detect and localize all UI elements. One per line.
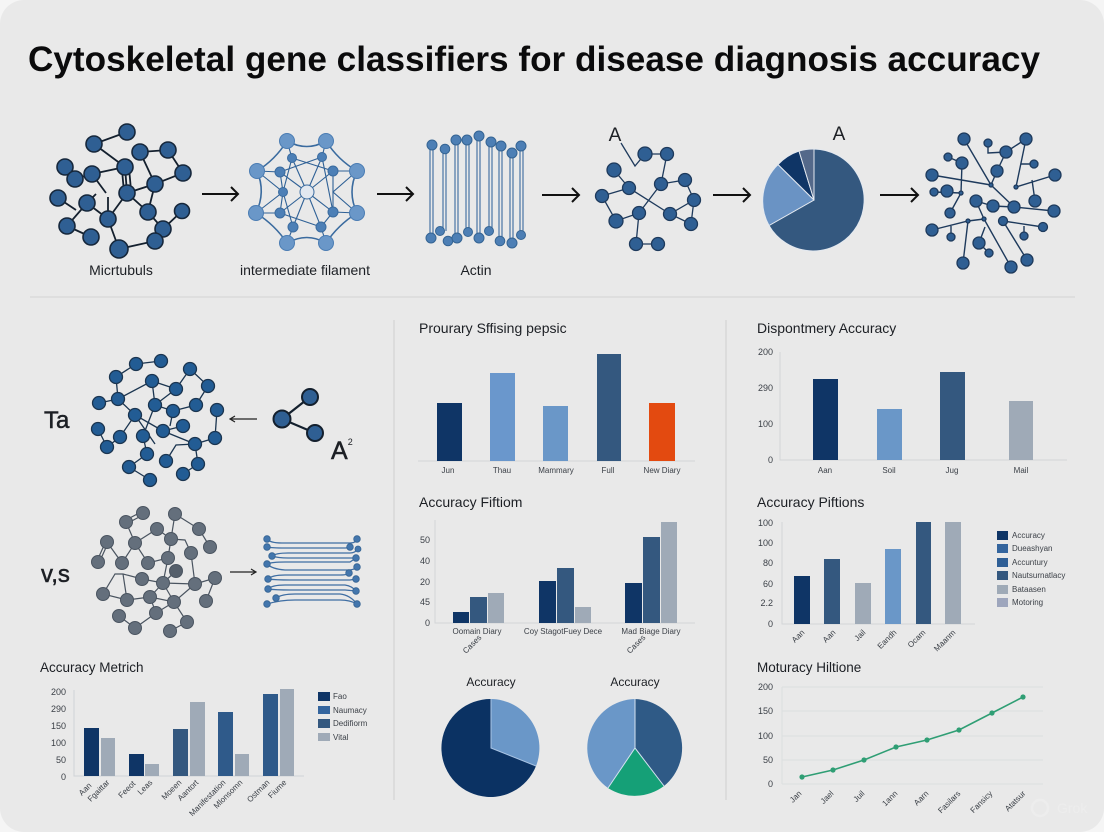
y axis labels bbox=[758, 518, 773, 629]
legend: Accuracy bbox=[1012, 531, 1045, 540]
y axis labels: 80 bbox=[763, 558, 773, 568]
y axis labels: 200 bbox=[51, 687, 66, 697]
x axis labels: Fiume bbox=[266, 778, 289, 800]
x axis labels: Mad Biage Diary bbox=[621, 627, 681, 636]
y axis labels: 100 bbox=[758, 518, 773, 528]
x axis labels: Aarn bbox=[912, 789, 930, 807]
y axis labels: 40 bbox=[420, 556, 430, 566]
legend: Fao bbox=[333, 692, 347, 701]
y axis labels: 150 bbox=[758, 706, 773, 716]
label: microtubules: Micrtubuls bbox=[89, 262, 153, 278]
icon: actin filaments bbox=[426, 131, 526, 248]
chart title: Accuracy Piftions bbox=[757, 494, 864, 510]
x axis labels: Oomain Diary bbox=[453, 627, 501, 636]
y axis labels: 20 bbox=[420, 577, 430, 587]
x axis labels: Coy StagotFuey Dece bbox=[524, 627, 603, 636]
x axis labels: Atatsur bbox=[1003, 789, 1028, 813]
x axis labels: Maanm bbox=[932, 628, 958, 653]
x axis labels: Full bbox=[602, 466, 615, 475]
chart title: Moturacy Hiltione bbox=[757, 660, 861, 675]
y axis labels: 0 bbox=[768, 779, 773, 789]
icon: intermediate filament network bbox=[248, 134, 364, 250]
pie chart: Accuracy 2 bbox=[587, 675, 682, 796]
chart title: Dispontmery Accuracy bbox=[757, 320, 896, 336]
x axis labels: Leas bbox=[136, 778, 154, 797]
chart: Accuracy Fiftiom bbox=[419, 494, 695, 655]
y axis labels: 60 bbox=[763, 579, 773, 589]
y axis labels: 150 bbox=[51, 721, 66, 731]
legend: Bataasen bbox=[1012, 585, 1046, 594]
x axis labels: Jug bbox=[946, 466, 958, 475]
icon: blue network bbox=[92, 354, 224, 486]
label: intermediate filament: intermediate filament bbox=[240, 262, 370, 278]
bars bbox=[453, 522, 677, 623]
bars bbox=[813, 372, 1033, 460]
x axis labels bbox=[453, 627, 681, 655]
y axis labels bbox=[51, 687, 66, 782]
x axis labels: Fansicy bbox=[969, 789, 994, 815]
x axis labels: Jail bbox=[853, 628, 868, 643]
y axis labels bbox=[420, 535, 430, 628]
x axis labels: Aan bbox=[790, 628, 806, 644]
x axis labels: 1ann bbox=[880, 789, 899, 808]
label: Ta: Ta bbox=[44, 407, 70, 434]
label: actin: Actin bbox=[460, 262, 492, 278]
x axis labels: Soil bbox=[882, 466, 896, 475]
pie title: Accuracy bbox=[466, 675, 516, 689]
icon: branching network bbox=[926, 133, 1061, 273]
icon: small node trio bbox=[274, 389, 323, 441]
pie title: Accuracy bbox=[610, 675, 660, 689]
bars bbox=[84, 689, 294, 776]
x axis labels: Thau bbox=[493, 466, 511, 475]
pie chart: Accuracy 1 bbox=[441, 675, 539, 797]
y axis labels: 0 bbox=[61, 772, 66, 782]
x axis labels: Aan bbox=[818, 466, 832, 475]
y axis labels: 100 bbox=[51, 738, 66, 748]
x axis labels: Juil bbox=[852, 789, 867, 804]
panel: pipeline bbox=[50, 124, 1061, 278]
y axis labels: 100 bbox=[758, 731, 773, 741]
x axis labels: New Diary bbox=[644, 466, 680, 475]
x axis labels: Eandh bbox=[876, 628, 898, 651]
watermark: Grok bbox=[1057, 800, 1088, 816]
legend: Nautsurnatlacy bbox=[1012, 571, 1065, 580]
label: v,s: v,s bbox=[41, 561, 70, 588]
arrow bbox=[542, 188, 579, 202]
arrow bbox=[202, 187, 238, 201]
arrow bbox=[377, 187, 413, 201]
y axis labels: 290 bbox=[51, 704, 66, 714]
y axis labels bbox=[758, 347, 773, 465]
arrow bbox=[230, 416, 257, 422]
x axis labels: Aan bbox=[821, 628, 837, 644]
watermark bbox=[1032, 800, 1088, 816]
y axis labels: 290 bbox=[758, 383, 773, 393]
label: A: A bbox=[833, 124, 846, 145]
legend: Motoring bbox=[1012, 598, 1043, 607]
x axis labels bbox=[818, 466, 1029, 475]
y axis labels: 0 bbox=[768, 455, 773, 465]
bars bbox=[437, 354, 675, 461]
legend: Dedifiorm bbox=[333, 719, 368, 728]
y axis labels: 0 bbox=[768, 619, 773, 629]
legend bbox=[318, 692, 368, 742]
y axis labels: 200 bbox=[758, 682, 773, 692]
label: A: A bbox=[609, 125, 622, 146]
x axis labels: Ocam bbox=[906, 628, 928, 650]
x axis labels: Jan bbox=[788, 789, 803, 805]
legend: Naumacy bbox=[333, 706, 367, 715]
y axis labels: 45 bbox=[420, 597, 430, 607]
x axis labels: Jael bbox=[819, 789, 836, 806]
legend: Dueashyan bbox=[1012, 544, 1052, 553]
x axis labels: Aan bbox=[77, 781, 93, 797]
legend bbox=[997, 531, 1065, 607]
x axis labels bbox=[788, 789, 1028, 815]
title: Cytoskeletal gene classifiers for disease diagnosis accuracy bbox=[28, 40, 1041, 79]
x axis labels: Feeot bbox=[117, 779, 138, 800]
y axis labels: 100 bbox=[758, 419, 773, 429]
panel: left networks bbox=[41, 354, 361, 638]
x axis labels: Ostman bbox=[245, 778, 271, 804]
chart: Accuracy Metrich bbox=[40, 660, 368, 818]
arrow bbox=[230, 569, 256, 575]
y axis labels: 50 bbox=[763, 755, 773, 765]
y axis labels: 100 bbox=[758, 538, 773, 548]
label: A squared: A bbox=[331, 437, 348, 465]
x axis labels: Mlonsomn bbox=[212, 778, 244, 811]
y axis labels: 200 bbox=[758, 347, 773, 357]
icon: microtubule network bbox=[50, 124, 191, 258]
arrow bbox=[713, 188, 750, 202]
icon: horizontal filaments bbox=[264, 536, 361, 607]
legend: Vital bbox=[333, 733, 349, 742]
y axis labels: 50 bbox=[56, 755, 66, 765]
x axis labels bbox=[77, 778, 289, 818]
chart: Moturacy Hiltione line chart bbox=[757, 660, 1043, 815]
x axis labels bbox=[790, 628, 958, 653]
chart title: Accuracy Metrich bbox=[40, 660, 144, 675]
x axis labels: Mammary bbox=[538, 466, 574, 475]
chart: Accuracy Piftions bbox=[757, 494, 1065, 653]
icon: classifier network bbox=[596, 143, 700, 250]
pie chart: pipeline bbox=[763, 149, 864, 251]
y axis labels: 2.2 bbox=[760, 598, 773, 608]
x axis labels: Mail bbox=[1014, 466, 1029, 475]
x axis labels: Fasilars bbox=[936, 789, 962, 815]
chart: Dispontmery Accuracy bbox=[757, 320, 1067, 475]
chart title: Accuracy Fiftiom bbox=[419, 494, 522, 510]
x axis labels: Cases bbox=[461, 633, 483, 655]
y axis labels: 0 bbox=[425, 618, 430, 628]
x axis labels: Cases bbox=[625, 633, 647, 655]
x axis labels: Manifestation bbox=[187, 778, 227, 818]
x axis labels: Jun bbox=[442, 466, 454, 475]
bars bbox=[794, 522, 961, 624]
x axis labels bbox=[442, 466, 680, 475]
x axis labels: Aantort bbox=[176, 778, 201, 803]
chart title: Prourary Sffising pepsic bbox=[419, 320, 567, 336]
y axis labels: 50 bbox=[420, 535, 430, 545]
legend: Accuntury bbox=[1012, 558, 1048, 567]
label: A squared: 2 bbox=[348, 437, 353, 447]
x axis labels: Fgaittar bbox=[86, 778, 112, 804]
line series bbox=[799, 694, 1026, 780]
y axis labels bbox=[758, 682, 773, 789]
icon: grey network bbox=[92, 506, 222, 638]
x axis labels: Moeen bbox=[160, 778, 183, 802]
chart: Prourary Sffising pepsic bbox=[418, 320, 695, 475]
arrow bbox=[880, 188, 918, 202]
